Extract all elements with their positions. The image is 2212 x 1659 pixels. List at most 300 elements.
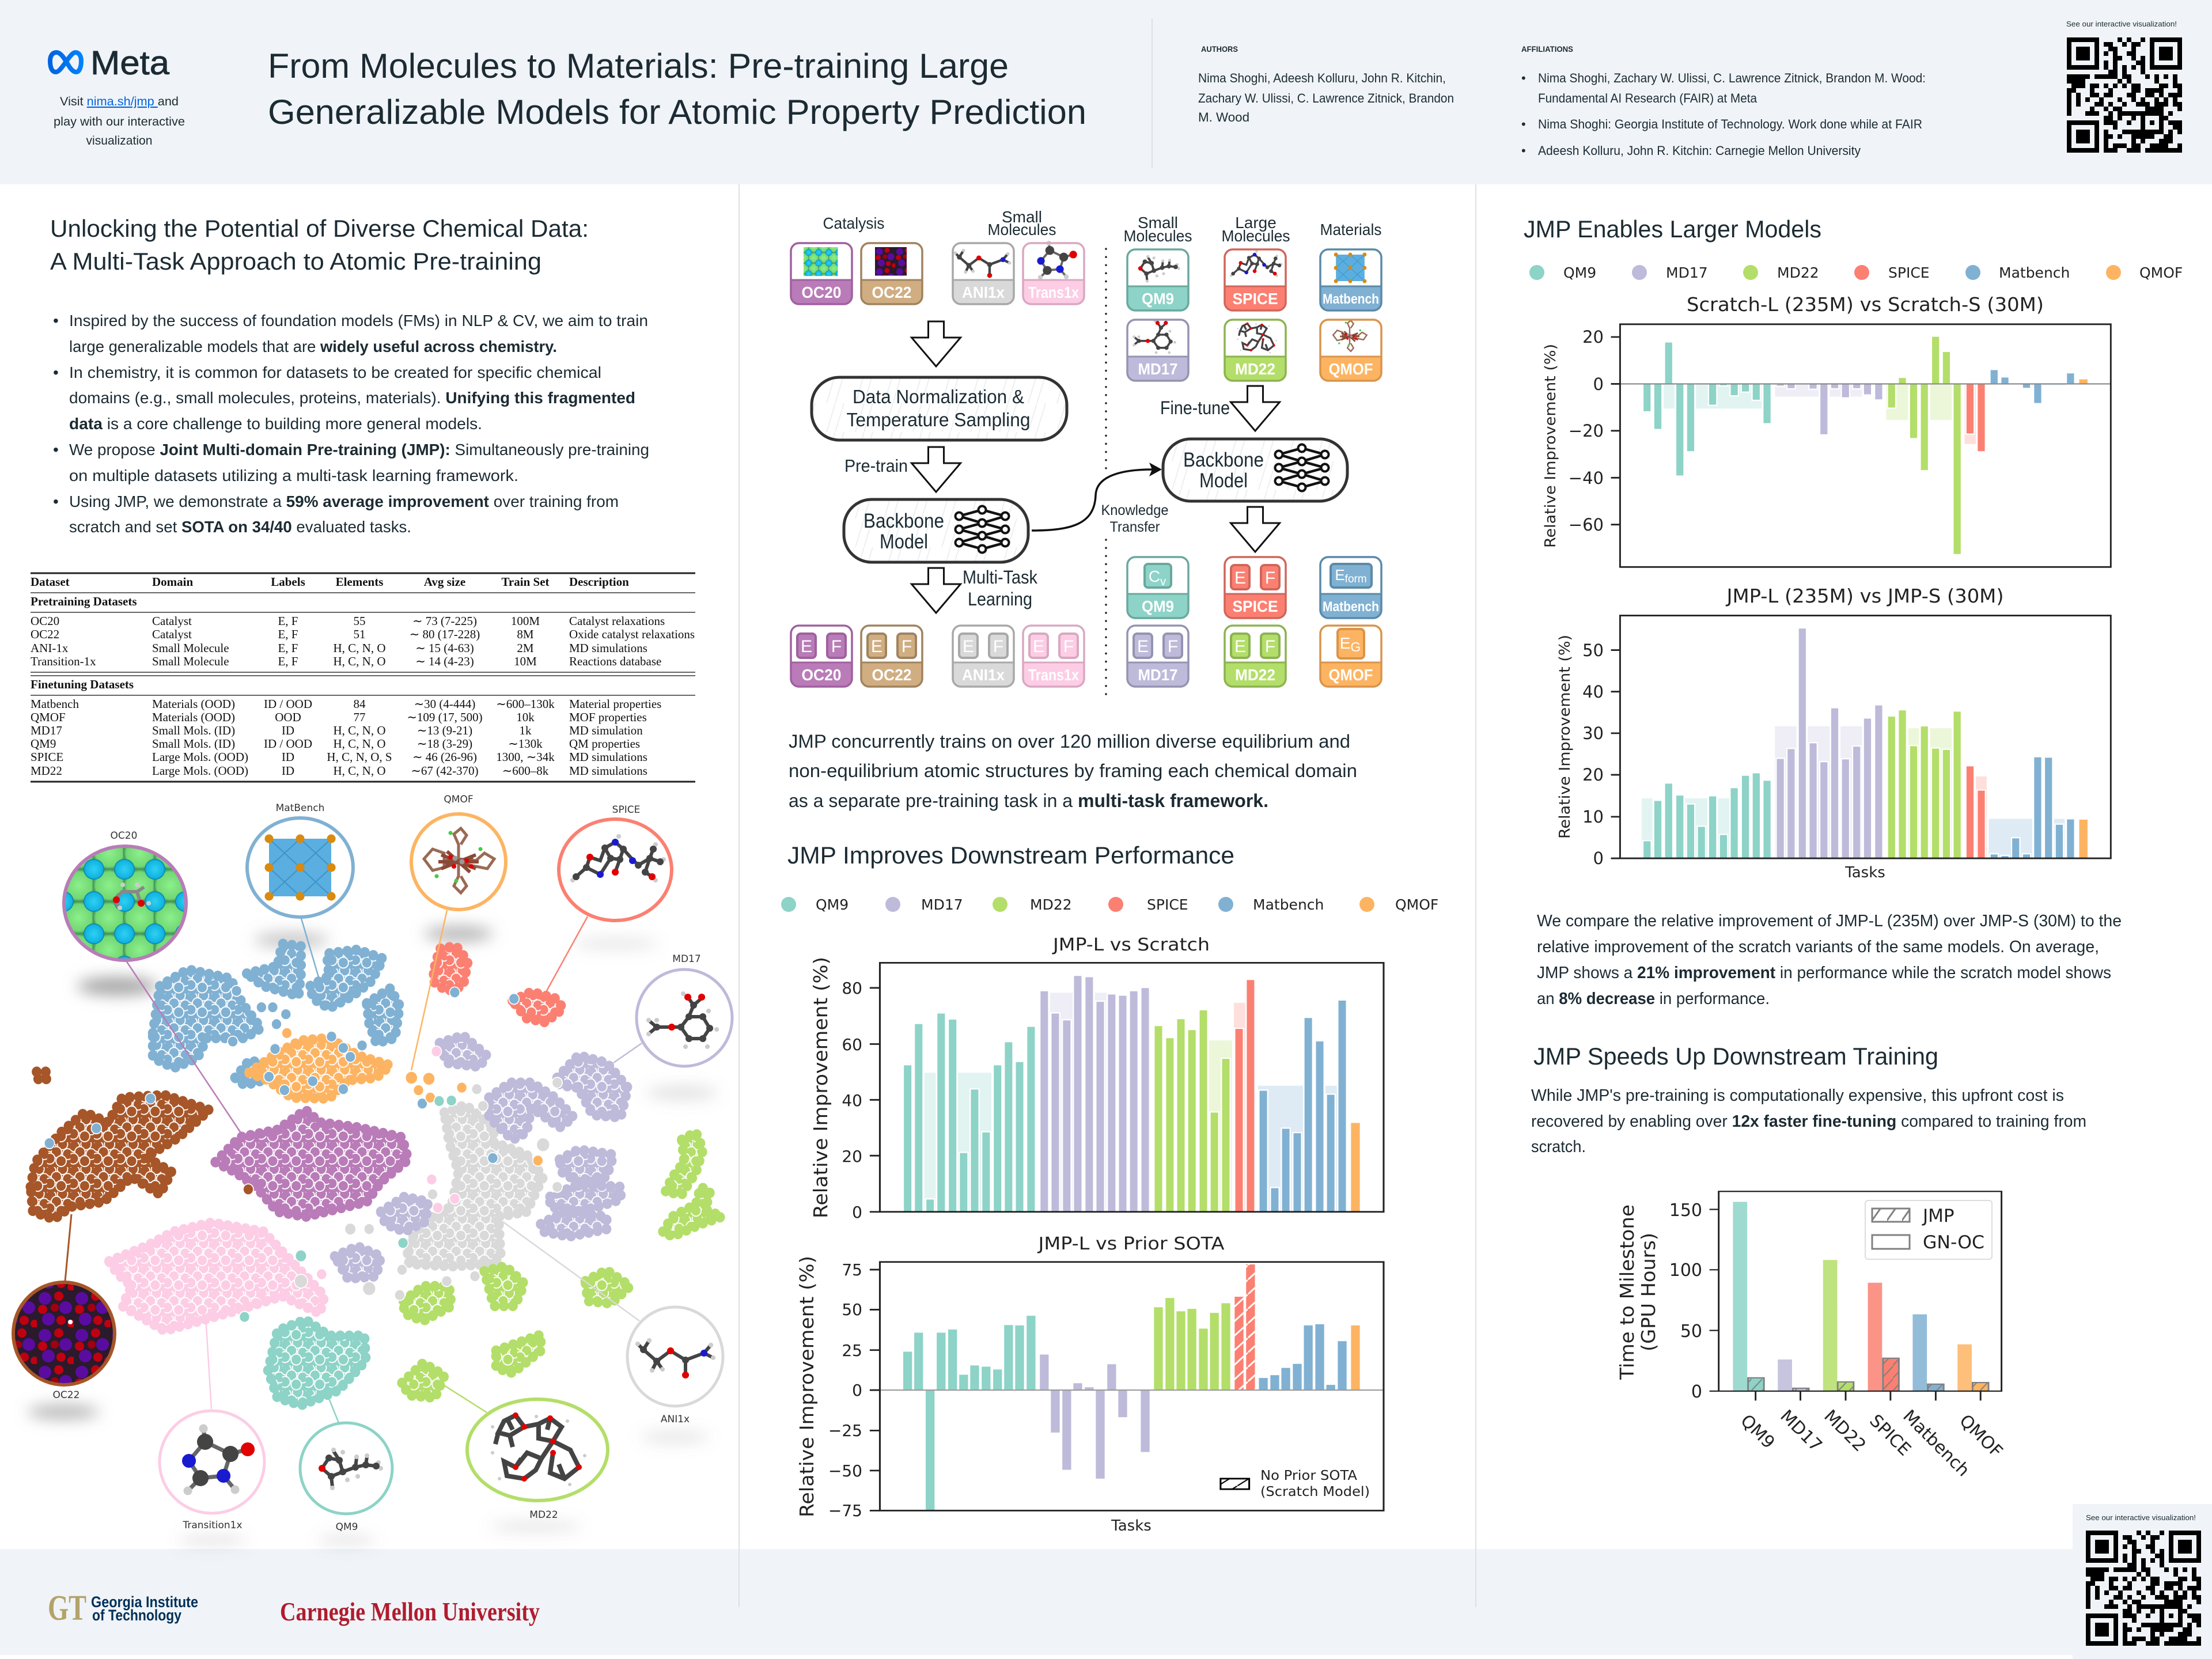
dataset table: ∼ 46 (26-96) — [412, 750, 477, 764]
dataset table: MOF properties — [569, 710, 647, 724]
chart: JMP-L vs Prior SOTA: −50 — [828, 1461, 862, 1480]
callout: QM9 — [300, 1423, 392, 1533]
callout: SPICE: SPICE — [612, 804, 640, 816]
cluster: OC20 — [215, 1110, 408, 1217]
chart: JMP-L vs JMP-S: Relative Improvement (%) — [1556, 635, 1574, 839]
dataset table: 77 — [354, 710, 365, 724]
chart: Scratch-L vs Scratch-S: Scratch-L (235M) vs Scratch-S (30M) — [1687, 293, 2044, 316]
QR code top — [2066, 20, 2182, 153]
dataset table: 10M — [514, 654, 537, 668]
heading: Unlocking the Potential of Diverse Chemical Data: — [50, 215, 589, 242]
output tile: QM9 — [1127, 557, 1188, 618]
dataset table: Large Mols. (OOD) — [152, 764, 248, 778]
tile: QM9 — [1127, 249, 1188, 310]
callout: MatBench: MatBench — [276, 802, 324, 814]
dataset table: 100M — [511, 614, 540, 628]
x axis labels: QM9 — [1736, 1411, 1779, 1453]
paragraph: training speed: scratch. — [1531, 1138, 1586, 1156]
chart: time to milestone: 150 — [1669, 1200, 1702, 1221]
tile: MD17: MD17 — [1138, 360, 1177, 378]
output tile: SPICE: SPICE — [1233, 597, 1278, 615]
legend: right: MD17 — [1666, 264, 1708, 281]
bullet list: domains (e.g., small molecules, proteins, materials). Unifying this fragmented — [69, 389, 635, 407]
output tile: Trans1x: E — [1033, 637, 1044, 656]
bars — [870, 963, 1384, 1212]
output tile: OC20: E — [801, 637, 812, 656]
dataset table: Pretraining Datasets — [31, 594, 137, 608]
dataset table — [31, 573, 695, 782]
chart: Scratch-L vs Scratch-S: 0 — [1593, 374, 1604, 394]
dataset table: MD simulations — [569, 750, 647, 764]
output tile: ANI1x: F — [993, 637, 1003, 656]
affiliations: Fundamental AI Research (FAIR) at Meta — [1538, 91, 1758, 105]
dataset table: OC20 — [31, 614, 59, 628]
dataset table: Material properties — [569, 697, 661, 711]
footer band — [0, 1504, 2212, 1659]
chart: JMP-L vs Prior SOTA: −25 — [828, 1421, 862, 1440]
bullet list: • — [53, 312, 59, 329]
output tile: MD17: F — [1168, 637, 1178, 656]
legend: middle: MD22 — [1030, 896, 1072, 913]
output tile: Trans1x — [1023, 626, 1084, 687]
dataset table: SPICE — [31, 750, 63, 764]
dataset table: H, C, N, O — [333, 654, 386, 668]
heading — [50, 215, 589, 275]
dataset table: 84 — [354, 697, 366, 711]
chart: JMP-L vs Prior SOTA: 0 — [852, 1381, 862, 1400]
dataset table: Small Molecule — [152, 641, 229, 655]
dataset table: Avg size — [424, 575, 465, 589]
paragraph: model size: an 8% decrease in performance. — [1537, 990, 1770, 1008]
dataset table: Train Set — [501, 575, 550, 589]
tile: OC22: OC22 — [872, 283, 911, 301]
dataset table: H, C, N, O — [333, 737, 386, 751]
legend: JMP and GN-OC: JMP — [1922, 1206, 1955, 1226]
dataset table: MD simulations — [569, 764, 647, 778]
bullet list: • — [53, 493, 59, 510]
arrow: to normalization — [911, 321, 961, 366]
bullet list: Using JMP, we demonstrate a 59% average improvement over training from — [69, 493, 619, 510]
output tile: ANI1x: E — [963, 637, 974, 656]
x axis labels: Matbench — [1899, 1406, 1974, 1480]
cluster: MD22 — [402, 1132, 722, 1397]
shadows under callouts — [28, 926, 718, 1546]
chart: JMP-L vs Prior SOTA: 50 — [842, 1300, 862, 1319]
bullet list: Inspired by the success of foundation models (FMs) in NLP & CV, we aim to train — [69, 312, 648, 329]
dataset table: OC22 — [31, 627, 59, 641]
dataset table: Finetuning Datasets — [31, 677, 134, 691]
callout: Transition1x — [160, 1411, 264, 1531]
dataset table: Small Mols. (ID) — [152, 737, 235, 751]
dataset table: ID / OOD — [264, 697, 312, 711]
dataset table: Catalyst relaxations — [569, 614, 665, 628]
paragraph: model size — [1537, 912, 2122, 1008]
legend: right: SPICE — [1888, 264, 1930, 281]
group labels: Small — [1138, 214, 1178, 232]
tile: QM9: QM9 — [1142, 290, 1174, 308]
chart: JMP-L vs Scratch: Relative Improvement (%) — [809, 957, 832, 1218]
scattered points — [44, 986, 562, 1323]
output tile: ANI1x — [953, 626, 1014, 687]
dataset table: Domain — [152, 575, 193, 589]
chart: JMP-L vs Prior SOTA: Tasks — [1111, 1517, 1152, 1535]
visit note — [54, 95, 185, 147]
dataset table: ANI-1x — [31, 641, 69, 655]
dataset table: ∼ 80 (17-228) — [410, 627, 480, 641]
output tile: SPICE: E — [1234, 569, 1246, 588]
panel: right column — [1524, 215, 2183, 1480]
affiliations: Nima Shoghi: Georgia Institute of Technology. Work done while at FAIR — [1538, 117, 1922, 131]
callout: OC22: OC22 — [53, 1389, 79, 1401]
legend: no prior SOTA: No Prior SOTA — [1260, 1468, 1357, 1483]
cluster: QMOF — [249, 1038, 391, 1099]
dataset table: Description — [569, 575, 629, 589]
bullet list — [53, 312, 649, 536]
output tile: MD22: E — [1234, 637, 1246, 656]
output tile: Matbench — [1320, 557, 1381, 618]
affiliations: AFFILIATIONS — [1521, 44, 1573, 54]
authors — [1198, 44, 1454, 124]
paragraph: model size: We compare the relative improvement of JMP-L (235M) over JMP-S (30M) to the — [1537, 912, 2122, 930]
title — [268, 47, 1086, 131]
bullet list: large generalizable models that are widely useful across chemistry. — [69, 338, 557, 355]
backbone model: pre-training: Model — [880, 531, 928, 553]
heading: A Multi-Task Approach to Atomic Pre-training — [50, 248, 541, 275]
dataset table: Transition-1x — [31, 654, 96, 668]
group labels: Molecules — [1123, 227, 1192, 245]
bars — [1611, 324, 2111, 567]
legend: right: QM9 — [1563, 264, 1596, 281]
output tile: OC22: OC22 — [872, 666, 911, 684]
output tile: Matbench: form — [1345, 573, 1367, 585]
output tile: QMOF: QMOF — [1328, 666, 1373, 684]
tile: OC20: OC20 — [802, 283, 841, 301]
dataset table: ID — [282, 764, 294, 778]
dataset table: ID — [282, 724, 294, 737]
chart: JMP-L vs Prior SOTA: 75 — [842, 1260, 862, 1279]
output tile: OC22: F — [902, 637, 912, 656]
flow diagram — [791, 208, 1381, 702]
chart: JMP-L vs Scratch: 20 — [842, 1147, 862, 1166]
bullet list: scratch and set SOTA on 34/40 evaluated tasks. — [69, 518, 411, 536]
chart: JMP-L vs JMP-S — [1556, 585, 2111, 881]
chart: time to milestone: 50 — [1680, 1321, 1702, 1342]
dataset table: ∼13 (9-21) — [417, 724, 472, 737]
paragraph: training speed: While JMP's pre-training is computationally expensive, this upfront cost is — [1531, 1086, 2064, 1105]
dataset table: ∼ 73 (7-225) — [412, 614, 477, 628]
output tiles: pre-training — [791, 626, 1084, 687]
output tile: ANI1x: ANI1x — [962, 666, 1005, 684]
output tile: SPICE — [1225, 557, 1286, 618]
callout: QM9: QM9 — [336, 1521, 358, 1533]
dataset table: QM properties — [569, 737, 640, 751]
output tile: QM9: QM9 — [1142, 597, 1174, 615]
output tile: QM9: v — [1160, 575, 1166, 588]
chart: JMP-L vs JMP-S: 10 — [1582, 807, 1604, 827]
dataset table: 10k — [516, 710, 535, 724]
arrow: multi-task learning: Learning — [968, 589, 1032, 609]
normalization box — [812, 377, 1067, 440]
callout: Transition1x: Transition1x — [182, 1520, 243, 1531]
dataset table: MD22 — [31, 764, 62, 778]
visit note: Visit nima.sh/jmp and — [60, 95, 179, 108]
authors: Nima Shoghi, Adeesh Kolluru, John R. Kitchin, — [1198, 71, 1446, 85]
bullet list: We propose Joint Multi-domain Pre-training (JMP): Simultaneously pre-training — [69, 441, 649, 459]
backbone model: pre-training — [844, 499, 1028, 562]
paragraph: training speed — [1531, 1086, 2086, 1156]
output tile: Matbench: Matbench — [1323, 599, 1379, 615]
bullet list: In chemistry, it is common for datasets to be created for specific chemical — [69, 363, 601, 381]
normalization box: Data Normalization & — [853, 386, 1024, 407]
dataset table: Oxide catalyst relaxations — [569, 627, 695, 641]
tile: MD22: MD22 — [1235, 360, 1275, 378]
legend: right: Matbench — [1999, 264, 2070, 281]
legend: middle: Matbench — [1253, 896, 1324, 913]
tile: ANI1x: ANI1x — [962, 283, 1005, 301]
chart: JMP-L vs JMP-S: JMP-L (235M) vs JMP-S (30M) — [1725, 585, 2003, 607]
backbone model: fine-tuning — [1163, 439, 1347, 501]
dataset table: ∼30 (4-444) — [414, 697, 475, 711]
backbone model: fine-tuning: Model — [1199, 469, 1248, 492]
heading: speeds up training: JMP Speeds Up Downstream Training — [1533, 1043, 1938, 1070]
authors: Zachary W. Ulissi, C. Lawrence Zitnick, Brandon — [1198, 91, 1454, 105]
x axis labels: SPICE — [1865, 1411, 1915, 1460]
chart: JMP-L vs Scratch: 40 — [842, 1091, 862, 1110]
group labels: Catalysis — [823, 214, 885, 232]
callout: OC22 — [13, 1282, 115, 1401]
tile: Matbench: Matbench — [1323, 291, 1379, 307]
chart: Scratch-L vs Scratch-S: Relative Improvement (%) — [1542, 344, 1559, 548]
dataset table: E, F — [278, 641, 298, 655]
callout: MD22: MD22 — [529, 1509, 558, 1521]
callout: MatBench — [247, 802, 353, 917]
bullet list: on multiple datasets utilizing a multi-task learning framework. — [69, 467, 518, 484]
cluster: Transition1x — [109, 1222, 324, 1331]
arrow: fine-tune — [1160, 386, 1280, 431]
output tile: QMOF: G — [1350, 639, 1361, 654]
cluster: OC22 — [31, 1072, 209, 1219]
tile: SPICE — [1225, 249, 1286, 310]
chart: Scratch-L vs Scratch-S: −60 — [1569, 515, 1604, 535]
dataset table: ∼67 (42-370) — [411, 764, 479, 778]
legend: middle: QM9 — [816, 896, 849, 913]
output tile: OC22 — [861, 626, 922, 687]
legend: right: QMOF — [2139, 264, 2183, 281]
callout: MD22 — [467, 1399, 608, 1521]
connector lines — [65, 910, 642, 1423]
chart: JMP-L vs Scratch: 80 — [842, 979, 862, 998]
legend: middle: MD17 — [921, 896, 963, 913]
arrow: knowledge transfer — [1032, 463, 1168, 535]
dataset table: 1300, ∼34k — [496, 750, 555, 764]
callout: OC20 — [64, 830, 186, 960]
dataset table: Large Mols. (OOD) — [152, 750, 248, 764]
chart: Scratch-L vs Scratch-S: −20 — [1569, 421, 1604, 441]
backbone model: pre-training: Backbone — [863, 510, 944, 532]
dataset table: 55 — [354, 614, 365, 628]
tile: OC22 — [861, 243, 922, 304]
cluster clouds — [31, 944, 722, 1405]
x axis labels: MD22 — [1820, 1406, 1870, 1456]
legend: JMP and GN-OC: GN-OC — [1923, 1232, 1984, 1253]
dataset table: Materials (OOD) — [152, 710, 235, 724]
dataset table: Matbench — [31, 697, 79, 711]
Meta logo: Meta — [90, 44, 170, 82]
dataset table: 8M — [517, 627, 534, 641]
header band — [0, 0, 2212, 184]
chart: JMP-L vs JMP-S: 20 — [1582, 765, 1604, 785]
affiliations — [1521, 44, 1926, 158]
tile: Trans1x: Trans1x — [1028, 283, 1079, 301]
legend: right: MD22 — [1777, 264, 1819, 281]
QR code bottom — [2086, 1513, 2201, 1646]
output tile: MD17: E — [1137, 637, 1149, 656]
affiliations: Adeesh Kolluru, John R. Kitchin: Carnegie Mellon University — [1538, 143, 1861, 158]
affiliations: • — [1521, 143, 1526, 158]
paragraph: model size: JMP shows a 21% improvement in performance while the scratch model shows — [1537, 964, 2111, 982]
chart: JMP-L vs JMP-S: Tasks — [1844, 864, 1885, 881]
dataset table: ∼600–130k — [496, 697, 555, 711]
output tile: OC20: OC20 — [802, 666, 841, 684]
t-SNE scatter map — [13, 794, 732, 1546]
QR code bottom: See our interactive visualization! — [2086, 1513, 2196, 1522]
chart: JMP-L vs JMP-S: 50 — [1582, 641, 1604, 660]
paragraph: model size: relative improvement of the scratch variants of the same models. On average, — [1537, 938, 2099, 956]
arrow: pre-train — [844, 447, 961, 492]
output tile: OC22: E — [871, 637, 882, 656]
chart: JMP-L vs Prior SOTA: JMP-L vs Prior SOTA — [1037, 1234, 1225, 1254]
dataset table: H, C, N, O — [333, 641, 386, 655]
output tile: OC20 — [791, 626, 852, 687]
chart: JMP-L vs Scratch: JMP-L vs Scratch — [1052, 935, 1210, 955]
dataset table: Elements — [336, 575, 383, 589]
tile: ANI1x — [953, 243, 1014, 304]
dataset table: Catalyst — [152, 627, 192, 641]
chart: time to milestone — [1616, 1191, 2006, 1480]
bullet list: • — [53, 441, 59, 459]
dataset table: 2M — [517, 641, 534, 655]
chart: JMP-L vs JMP-S: 30 — [1582, 724, 1604, 743]
bullet list: • — [53, 363, 59, 381]
group labels: Small — [1002, 208, 1042, 226]
bullet list: data is a core challenge to building more general models. — [69, 415, 482, 433]
heading: larger models: JMP Enables Larger Models — [1524, 215, 1821, 243]
legend: no prior SOTA — [1260, 1468, 1370, 1499]
dataset table: ∼109 (17, 500) — [407, 710, 483, 724]
group labels: Large — [1235, 214, 1277, 232]
output tile: QM9: C — [1149, 567, 1160, 585]
tile: QMOF — [1320, 320, 1381, 381]
arrow: to outputs — [1230, 507, 1280, 552]
bars — [1611, 616, 2111, 858]
tile: MD22 — [1225, 320, 1286, 381]
dataset table: MD17 — [31, 724, 62, 737]
dataset table: 1k — [520, 724, 532, 737]
middle paragraph: non-equilibrium atomic structures by framing each chemical domain — [789, 760, 1357, 781]
group labels: Molecules — [987, 221, 1056, 238]
arrow: multi-task learning: Multi-Task — [963, 567, 1038, 588]
arrow: pre-train: Pre-train — [844, 456, 908, 476]
cluster: QM9 — [268, 1320, 366, 1405]
chart: JMP-L vs Prior SOTA: Relative Improvement (%) — [796, 1256, 818, 1517]
dataset table: ID / OOD — [264, 737, 312, 751]
chart: Scratch-L vs Scratch-S: 20 — [1582, 327, 1604, 347]
backbone model: fine-tuning: Backbone — [1183, 449, 1264, 471]
dataset table: Catalyst — [152, 614, 192, 628]
output tile: QMOF — [1320, 626, 1381, 687]
Meta logo — [50, 44, 170, 82]
callout: MD17: MD17 — [672, 953, 701, 965]
bars — [1710, 1191, 2002, 1400]
title: From Molecules to Materials: Pre-training Large — [268, 47, 1009, 85]
input tiles: pre-training — [791, 243, 1084, 304]
cluster: SPICE — [433, 946, 563, 1022]
panel: left column intro — [50, 215, 649, 536]
chart: Scratch-L vs Scratch-S — [1542, 293, 2111, 567]
callout: ANI1x — [627, 1307, 723, 1425]
arrow: knowledge transfer: Transfer — [1109, 519, 1160, 535]
affiliations: • — [1521, 117, 1526, 131]
dataset table: Reactions database — [569, 654, 661, 668]
chart: JMP-L vs Scratch: 60 — [842, 1035, 862, 1054]
visit note: play with our interactive — [54, 115, 185, 128]
dataset table: Small Molecule — [152, 654, 229, 668]
middle paragraph: JMP concurrently trains on over 120 million diverse equilibrium and — [789, 731, 1350, 752]
Carnegie Mellon logo: Carnegie Mellon University — [280, 1597, 540, 1626]
chart: JMP-L vs Prior SOTA: −75 — [828, 1501, 862, 1520]
output tile: Trans1x: Trans1x — [1028, 666, 1079, 684]
output tiles: fine-tuning — [1127, 557, 1381, 687]
cluster: MD17 — [335, 1036, 628, 1279]
tile: Trans1x — [1023, 243, 1084, 304]
Georgia Tech logo: GT — [48, 1589, 86, 1628]
authors: M. Wood — [1198, 110, 1249, 124]
chart: time to milestone: (GPU Hours) — [1637, 1233, 1660, 1351]
chart: JMP-L vs JMP-S: 0 — [1593, 849, 1604, 868]
dataset table: H, C, N, O — [333, 724, 386, 737]
affiliations: Nima Shoghi, Zachary W. Ulissi, C. Lawrence Zitnick, Brandon M. Wood: — [1538, 71, 1926, 85]
chart: Scratch-L vs Scratch-S: −40 — [1569, 468, 1604, 488]
output tile: SPICE: F — [1265, 569, 1275, 588]
tile: QMOF: QMOF — [1328, 360, 1373, 378]
Georgia Tech logo: of Technology — [92, 1607, 181, 1624]
output tile: OC20: F — [831, 637, 842, 656]
tile: MD17 — [1127, 320, 1188, 381]
chart: JMP-L vs Scratch: 0 — [852, 1203, 862, 1222]
middle paragraph — [789, 731, 1357, 811]
chart: JMP-L vs JMP-S: 40 — [1582, 682, 1604, 702]
chart: JMP-L vs Prior SOTA: 25 — [842, 1341, 862, 1360]
Georgia Tech logo — [48, 1589, 198, 1628]
output tile: MD22 — [1225, 626, 1286, 687]
output tile: Matbench: E — [1335, 566, 1345, 584]
chart: time to milestone: Time to Milestone — [1616, 1205, 1638, 1380]
QR code top: See our interactive visualization! — [2066, 20, 2177, 28]
output tile: QMOF: E — [1340, 634, 1350, 652]
legend: no prior SOTA: (Scratch Model) — [1260, 1484, 1370, 1499]
callout: ANI1x: ANI1x — [661, 1414, 690, 1425]
bars — [870, 1262, 1384, 1510]
dataset table: MD simulations — [569, 641, 647, 655]
authors: AUTHORS — [1201, 44, 1238, 54]
dataset table: H, C, N, O, S — [327, 750, 392, 764]
tile: OC20 — [791, 243, 852, 304]
chart: JMP-L vs Prior SOTA — [796, 1234, 1384, 1535]
dataset table: ∼130k — [508, 737, 543, 751]
affiliations: • — [1521, 71, 1526, 85]
x axis labels: QMOF — [1955, 1411, 2006, 1462]
legend: middle: QMOF — [1395, 896, 1438, 913]
